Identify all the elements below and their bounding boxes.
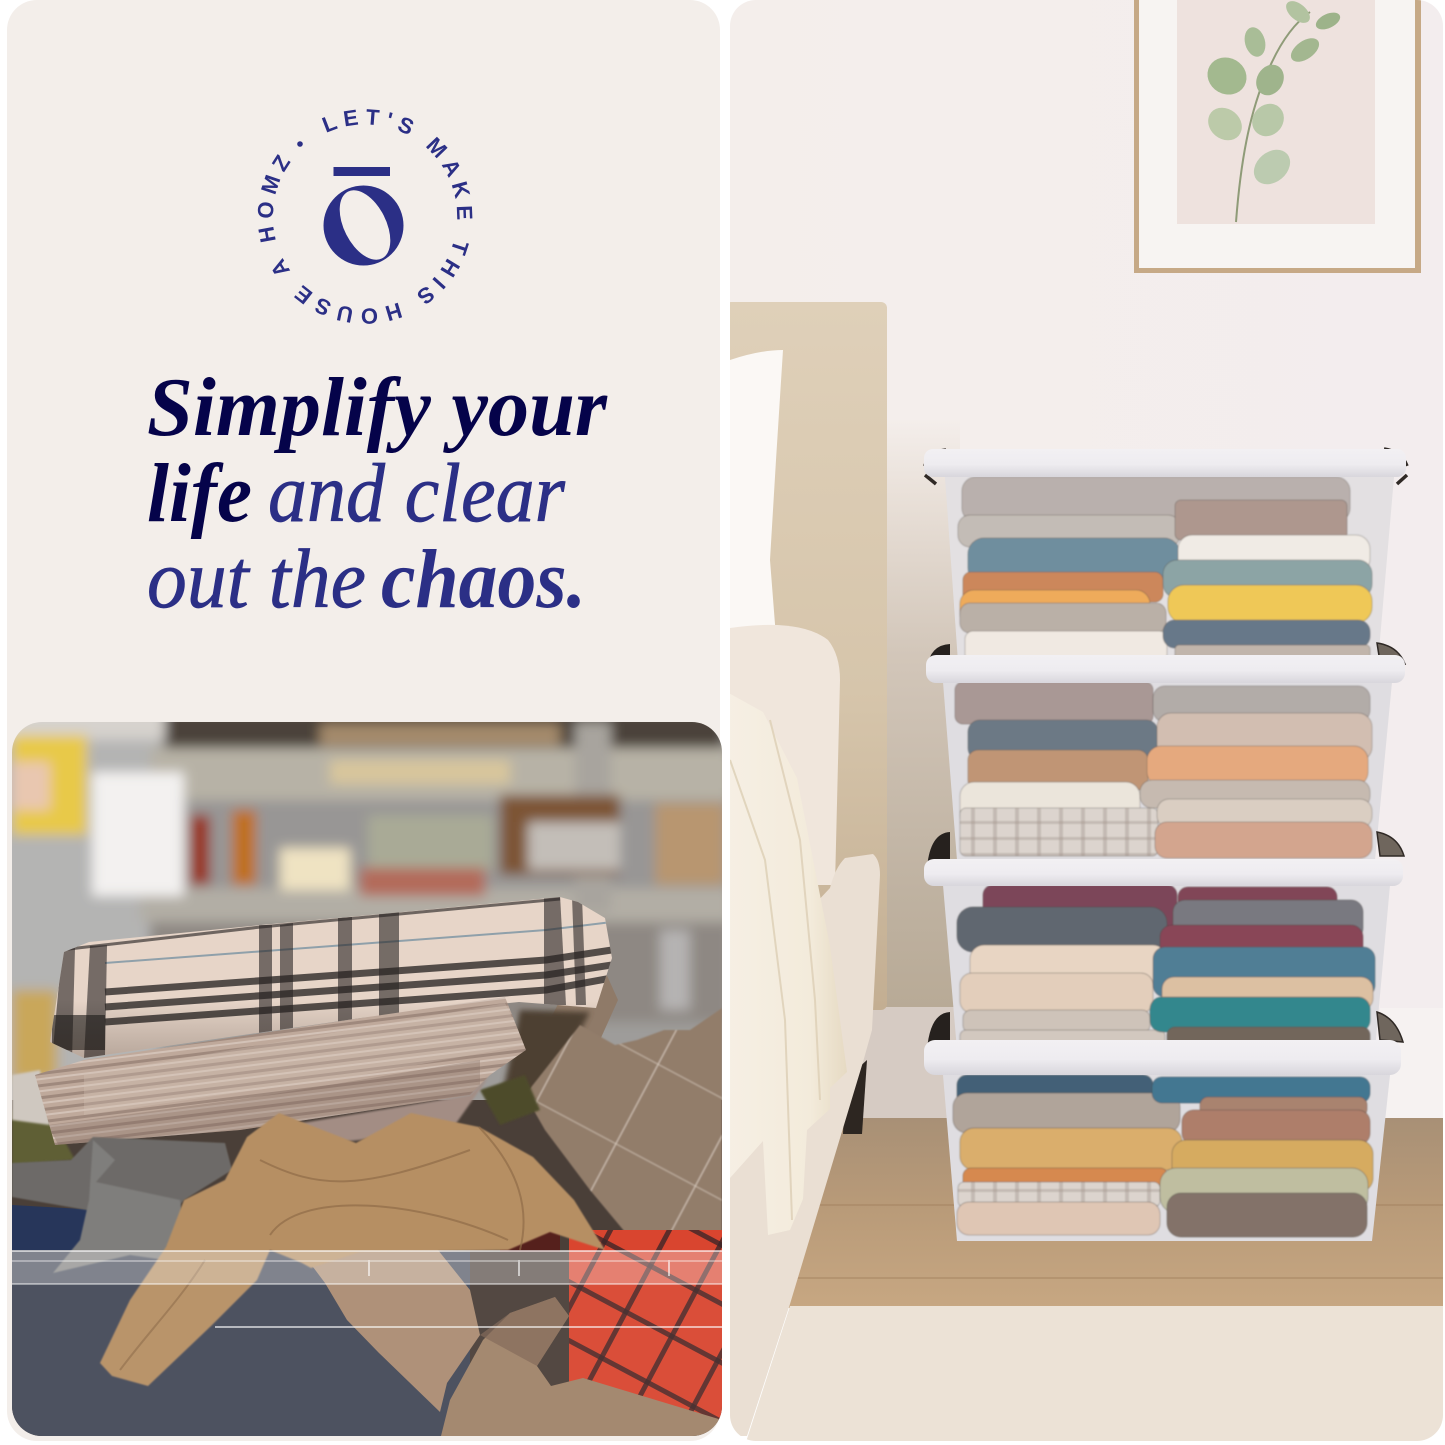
right latch xyxy=(1377,832,1404,856)
panel: left cream panel xyxy=(7,0,720,1441)
clear bin body xyxy=(945,477,1394,662)
dark red scrap xyxy=(500,1232,560,1252)
lower photo base xyxy=(12,1100,722,1436)
wood floor xyxy=(780,1118,1445,1308)
baseboard right xyxy=(1380,1008,1445,1120)
blanket plaid bands xyxy=(52,895,586,1060)
panel: tidy bedroom photo xyxy=(725,0,1445,1445)
latch marks xyxy=(925,449,1407,484)
baseboard left in shadow xyxy=(862,1007,962,1120)
lower tan cloth in bin xyxy=(440,1297,722,1440)
brown windowpane cloth xyxy=(530,1008,722,1230)
tan crumpled shirt xyxy=(100,1113,605,1386)
lid xyxy=(924,1040,1401,1075)
storage bin 3 xyxy=(924,832,1404,1050)
mattress xyxy=(730,625,840,885)
leaf branch xyxy=(1201,0,1343,222)
cream blanket xyxy=(725,691,847,1235)
tan cloth folds xyxy=(120,1127,524,1370)
light throw left of blankets xyxy=(12,1070,50,1125)
white pillow xyxy=(730,350,783,637)
lid xyxy=(926,655,1405,683)
headline line 2 regular: and clear xyxy=(268,447,565,540)
framed botanical print xyxy=(1134,0,1421,273)
headline xyxy=(147,361,608,626)
storage bin 1 xyxy=(924,449,1407,662)
plaid folded blanket xyxy=(50,897,612,1058)
left latch xyxy=(927,832,950,868)
clear bin body xyxy=(943,1075,1390,1241)
bin haze xyxy=(12,1284,722,1436)
logo badge xyxy=(258,109,472,324)
left latch xyxy=(927,1012,950,1050)
left latch xyxy=(927,644,950,668)
upholstered headboard xyxy=(725,302,887,1010)
red plaid cloth xyxy=(569,1230,729,1420)
navy fabric behind xyxy=(12,1205,87,1250)
folded clothes xyxy=(955,682,1372,858)
frosted plastic veil xyxy=(943,1075,1390,1241)
blanket twill stripes xyxy=(105,950,612,1022)
bed frame xyxy=(725,854,880,1436)
blurred pantry background xyxy=(0,710,740,1110)
blanket check squares xyxy=(52,1015,105,1050)
bed leg xyxy=(843,1060,867,1134)
clear bin body xyxy=(943,682,1392,860)
clear bin rim xyxy=(12,1251,722,1284)
right latch xyxy=(1377,643,1405,664)
dark navy lower cloth xyxy=(12,1250,470,1440)
folded clothes xyxy=(953,1075,1373,1237)
dark gap beside blankets xyxy=(500,1006,592,1089)
wall xyxy=(730,0,1443,1130)
headline line 1: Simplify your xyxy=(147,361,608,454)
headline line 2 bold: life xyxy=(147,447,252,540)
panel: messy bin photo xyxy=(0,710,740,1440)
taupe folded blanket xyxy=(35,997,526,1145)
muted tan cloth in bin xyxy=(313,1250,480,1412)
folded clothes xyxy=(957,885,1375,1048)
rim edges and ticks xyxy=(12,1251,722,1327)
grey woven throw xyxy=(12,1136,232,1210)
rug xyxy=(745,1306,1445,1445)
lid xyxy=(924,859,1403,886)
blanket fringe xyxy=(302,1080,486,1142)
right latch xyxy=(1377,1012,1403,1042)
shadow beside headboard xyxy=(885,420,960,1010)
dark olive fringe xyxy=(12,1118,74,1164)
tan bin cloth shade xyxy=(480,1297,569,1366)
storage bin 4 xyxy=(924,1012,1403,1241)
folded clothes xyxy=(958,477,1372,662)
headline line 3 regular: out the xyxy=(147,533,366,626)
logo mark: o with macron xyxy=(324,167,404,268)
storage bin 2 xyxy=(926,643,1405,860)
circular tagline: LET'S MAKE THIS HOUSE A HOMZ xyxy=(258,109,472,324)
grey tassels xyxy=(53,1140,184,1273)
ring dot xyxy=(297,141,303,147)
frosted plastic veil xyxy=(943,885,1390,1050)
frosted plastic veil xyxy=(945,477,1394,662)
blanket end flap xyxy=(554,975,618,1038)
frosted plastic veil xyxy=(943,682,1392,860)
lid xyxy=(924,449,1406,477)
clear bin body xyxy=(943,885,1390,1050)
headline line 3 bold: chaos. xyxy=(381,533,586,626)
